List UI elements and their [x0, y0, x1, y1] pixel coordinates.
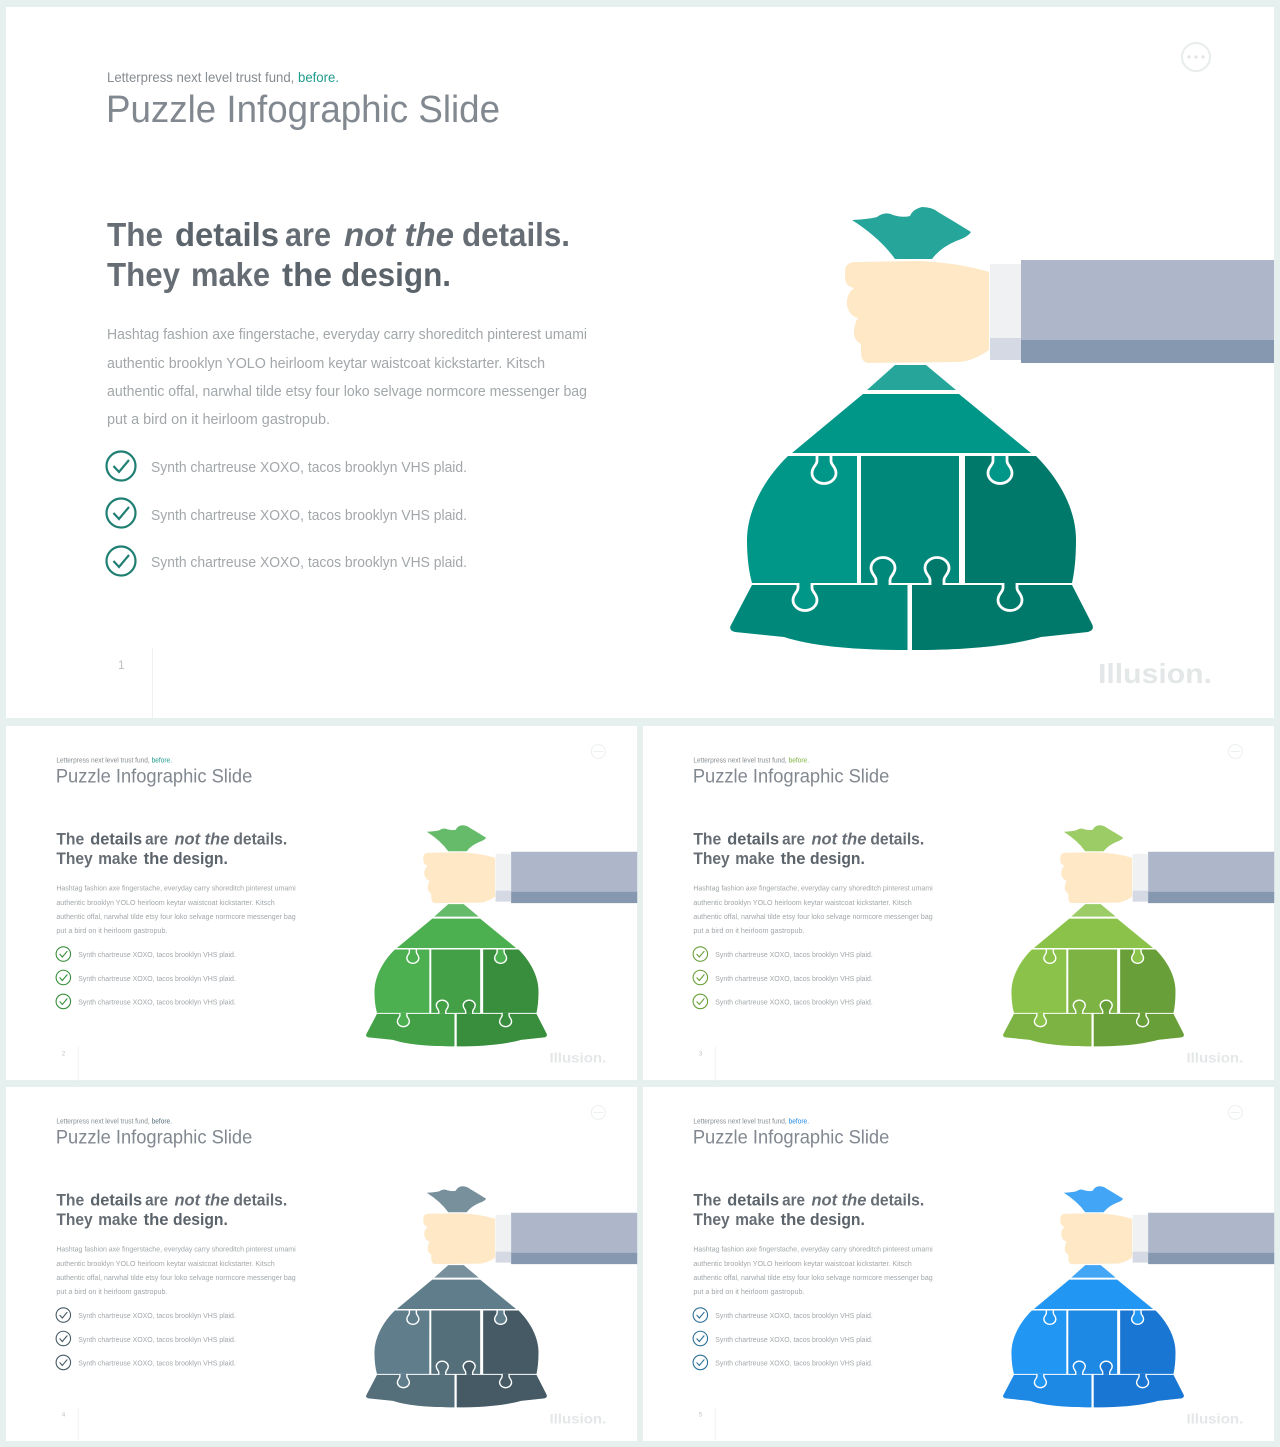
- headline: details: [727, 830, 779, 848]
- headline: The: [56, 1191, 84, 1209]
- body text: [107, 327, 587, 428]
- body text: authentic offal, narwhal tilde etsy four loko selvage normcore messenger bag: [693, 912, 933, 921]
- illustration: hand holding puzzle bag: [1003, 1186, 1274, 1407]
- logo: Illusion.: [1186, 1410, 1243, 1426]
- logo: Illusion.: [549, 1410, 606, 1426]
- body text: put a bird on it heirloom gastropub.: [56, 926, 168, 935]
- checklist: Synth chartreuse XOXO, tacos brooklyn VHS plaid.: [78, 974, 236, 983]
- headline: the: [144, 850, 169, 868]
- body text: authentic offal, narwhal tilde etsy four loko selvage normcore messenger bag: [693, 1273, 933, 1282]
- panel: blue slide: [643, 1087, 1274, 1442]
- headline: the: [144, 1211, 169, 1229]
- checklist: Synth chartreuse XOXO, tacos brooklyn VHS plaid.: [78, 1335, 236, 1344]
- headline: the: [781, 850, 806, 868]
- checklist: Synth chartreuse XOXO, tacos brooklyn VHS plaid.: [151, 555, 467, 571]
- checklist: Synth chartreuse XOXO, tacos brooklyn VHS plaid.: [78, 950, 236, 959]
- logo: Illusion.: [1186, 1049, 1243, 1065]
- title: Puzzle Infographic Slide: [106, 89, 500, 131]
- checklist: Synth chartreuse XOXO, tacos brooklyn VHS plaid.: [715, 1311, 873, 1320]
- title: Puzzle Infographic Slide: [56, 766, 252, 787]
- headline: The: [56, 830, 84, 848]
- checklist: Synth chartreuse XOXO, tacos brooklyn VHS plaid.: [78, 1358, 236, 1367]
- body text: put a bird on it heirloom gastropub.: [56, 1287, 168, 1296]
- title: Puzzle Infographic Slide: [693, 1127, 889, 1148]
- page number: 5: [699, 1412, 703, 1418]
- small heading: Letterpress next level trust fund, before.: [56, 1118, 172, 1125]
- illustration: hand holding puzzle bag: [366, 825, 637, 1046]
- headline: not the: [812, 1191, 866, 1209]
- headline: the: [282, 256, 332, 293]
- headline: They: [56, 850, 94, 868]
- headline: They: [693, 850, 731, 868]
- small heading: Letterpress next level trust fund, before.: [693, 757, 809, 764]
- headline: They: [107, 256, 181, 293]
- headline: details.: [233, 1191, 287, 1209]
- headline: [107, 216, 570, 293]
- small heading: Letterpress next level trust fund, before.: [107, 69, 339, 85]
- headline: [56, 830, 287, 868]
- headline: make: [735, 1211, 775, 1229]
- headline: not the: [175, 830, 229, 848]
- headline: not the: [344, 216, 454, 253]
- checklist: [56, 1308, 236, 1370]
- headline: design.: [810, 850, 865, 868]
- small heading: Letterpress next level trust fund, before.: [56, 757, 172, 764]
- checklist: Synth chartreuse XOXO, tacos brooklyn VHS plaid.: [151, 508, 467, 524]
- page number: 3: [699, 1051, 703, 1057]
- headline: details: [175, 216, 279, 253]
- checklist: [693, 1308, 873, 1370]
- checklist: Synth chartreuse XOXO, tacos brooklyn VHS plaid.: [715, 1358, 873, 1367]
- body text: [56, 1245, 296, 1296]
- illustration: hand holding puzzle bag: [1003, 825, 1274, 1046]
- body text: Hashtag fashion axe fingerstache, everyday carry shoreditch pinterest umami: [56, 884, 296, 893]
- body text: put a bird on it heirloom gastropub.: [107, 412, 330, 428]
- body text: Hashtag fashion axe fingerstache, everyday carry shoreditch pinterest umami: [693, 884, 933, 893]
- body text: authentic offal, narwhal tilde etsy four loko selvage normcore messenger bag: [107, 384, 587, 400]
- headline: The: [107, 216, 163, 253]
- panel: green slide: [6, 726, 637, 1081]
- checklist: Synth chartreuse XOXO, tacos brooklyn VHS plaid.: [715, 1335, 873, 1344]
- headline: [693, 1191, 924, 1229]
- body text: authentic brooklyn YOLO heirloom keytar waistcoat kickstarter. Kitsch: [56, 898, 275, 907]
- checklist: [106, 452, 467, 576]
- page number: 2: [62, 1051, 66, 1057]
- headline: They: [56, 1211, 94, 1229]
- headline: make: [98, 1211, 138, 1229]
- headline: details.: [233, 830, 287, 848]
- headline: details.: [870, 1191, 924, 1209]
- icon: menu dots: [591, 1105, 605, 1119]
- body text: authentic brooklyn YOLO heirloom keytar waistcoat kickstarter. Kitsch: [693, 1259, 912, 1268]
- body text: [693, 1245, 933, 1296]
- headline: are: [782, 1191, 805, 1209]
- icon: menu dots: [1182, 43, 1210, 71]
- body text: Hashtag fashion axe fingerstache, everyday carry shoreditch pinterest umami: [693, 1245, 933, 1254]
- logo: Illusion.: [549, 1049, 606, 1065]
- logo: Illusion.: [1098, 658, 1212, 689]
- body text: Hashtag fashion axe fingerstache, everyday carry shoreditch pinterest umami: [56, 1245, 296, 1254]
- title: Puzzle Infographic Slide: [56, 1127, 252, 1148]
- checklist: [56, 947, 236, 1009]
- body text: [56, 884, 296, 935]
- headline: make: [191, 256, 270, 293]
- body text: authentic brooklyn YOLO heirloom keytar waistcoat kickstarter. Kitsch: [56, 1259, 275, 1268]
- checklist: Synth chartreuse XOXO, tacos brooklyn VHS plaid.: [715, 974, 873, 983]
- headline: design.: [173, 1211, 228, 1229]
- headline: make: [735, 850, 775, 868]
- headline: [56, 1191, 287, 1229]
- headline: design.: [341, 256, 451, 293]
- headline: are: [782, 830, 805, 848]
- headline: are: [285, 216, 331, 253]
- checklist: Synth chartreuse XOXO, tacos brooklyn VHS plaid.: [78, 997, 236, 1006]
- headline: The: [693, 1191, 721, 1209]
- panel: blue-grey slide: [6, 1087, 637, 1442]
- body text: Hashtag fashion axe fingerstache, everyday carry shoreditch pinterest umami: [107, 327, 587, 343]
- headline: not the: [812, 830, 866, 848]
- body text: [693, 884, 933, 935]
- checklist: Synth chartreuse XOXO, tacos brooklyn VHS plaid.: [715, 950, 873, 959]
- checklist: Synth chartreuse XOXO, tacos brooklyn VHS plaid.: [78, 1311, 236, 1320]
- headline: details: [90, 830, 142, 848]
- panel: lime slide: [643, 726, 1274, 1081]
- body text: authentic offal, narwhal tilde etsy four loko selvage normcore messenger bag: [56, 1273, 296, 1282]
- icon: menu dots: [1228, 744, 1242, 758]
- body text: put a bird on it heirloom gastropub.: [693, 1287, 805, 1296]
- checklist: Synth chartreuse XOXO, tacos brooklyn VHS plaid.: [715, 997, 873, 1006]
- illustration: hand holding puzzle bag: [730, 207, 1274, 650]
- body text: authentic brooklyn YOLO heirloom keytar waistcoat kickstarter. Kitsch: [693, 898, 912, 907]
- headline: the: [781, 1211, 806, 1229]
- headline: are: [145, 830, 168, 848]
- page number: 1: [118, 658, 125, 672]
- headline: details: [90, 1191, 142, 1209]
- headline: are: [145, 1191, 168, 1209]
- headline: details: [727, 1191, 779, 1209]
- body text: put a bird on it heirloom gastropub.: [693, 926, 805, 935]
- headline: The: [693, 830, 721, 848]
- headline: details.: [870, 830, 924, 848]
- checklist: Synth chartreuse XOXO, tacos brooklyn VHS plaid.: [151, 460, 467, 476]
- headline: They: [693, 1211, 731, 1229]
- checklist: [693, 947, 873, 1009]
- body text: authentic offal, narwhal tilde etsy four loko selvage normcore messenger bag: [56, 912, 296, 921]
- body text: authentic brooklyn YOLO heirloom keytar waistcoat kickstarter. Kitsch: [107, 356, 545, 372]
- title: Puzzle Infographic Slide: [693, 766, 889, 787]
- headline: make: [98, 850, 138, 868]
- headline: not the: [175, 1191, 229, 1209]
- illustration: hand holding puzzle bag: [366, 1186, 637, 1407]
- headline: design.: [173, 850, 228, 868]
- headline: details.: [462, 216, 570, 253]
- page number: 4: [62, 1412, 66, 1418]
- icon: menu dots: [1228, 1105, 1242, 1119]
- panel: main teal slide: [6, 7, 1274, 718]
- headline: [693, 830, 924, 868]
- icon: menu dots: [591, 744, 605, 758]
- small heading: Letterpress next level trust fund, before.: [693, 1118, 809, 1125]
- headline: design.: [810, 1211, 865, 1229]
